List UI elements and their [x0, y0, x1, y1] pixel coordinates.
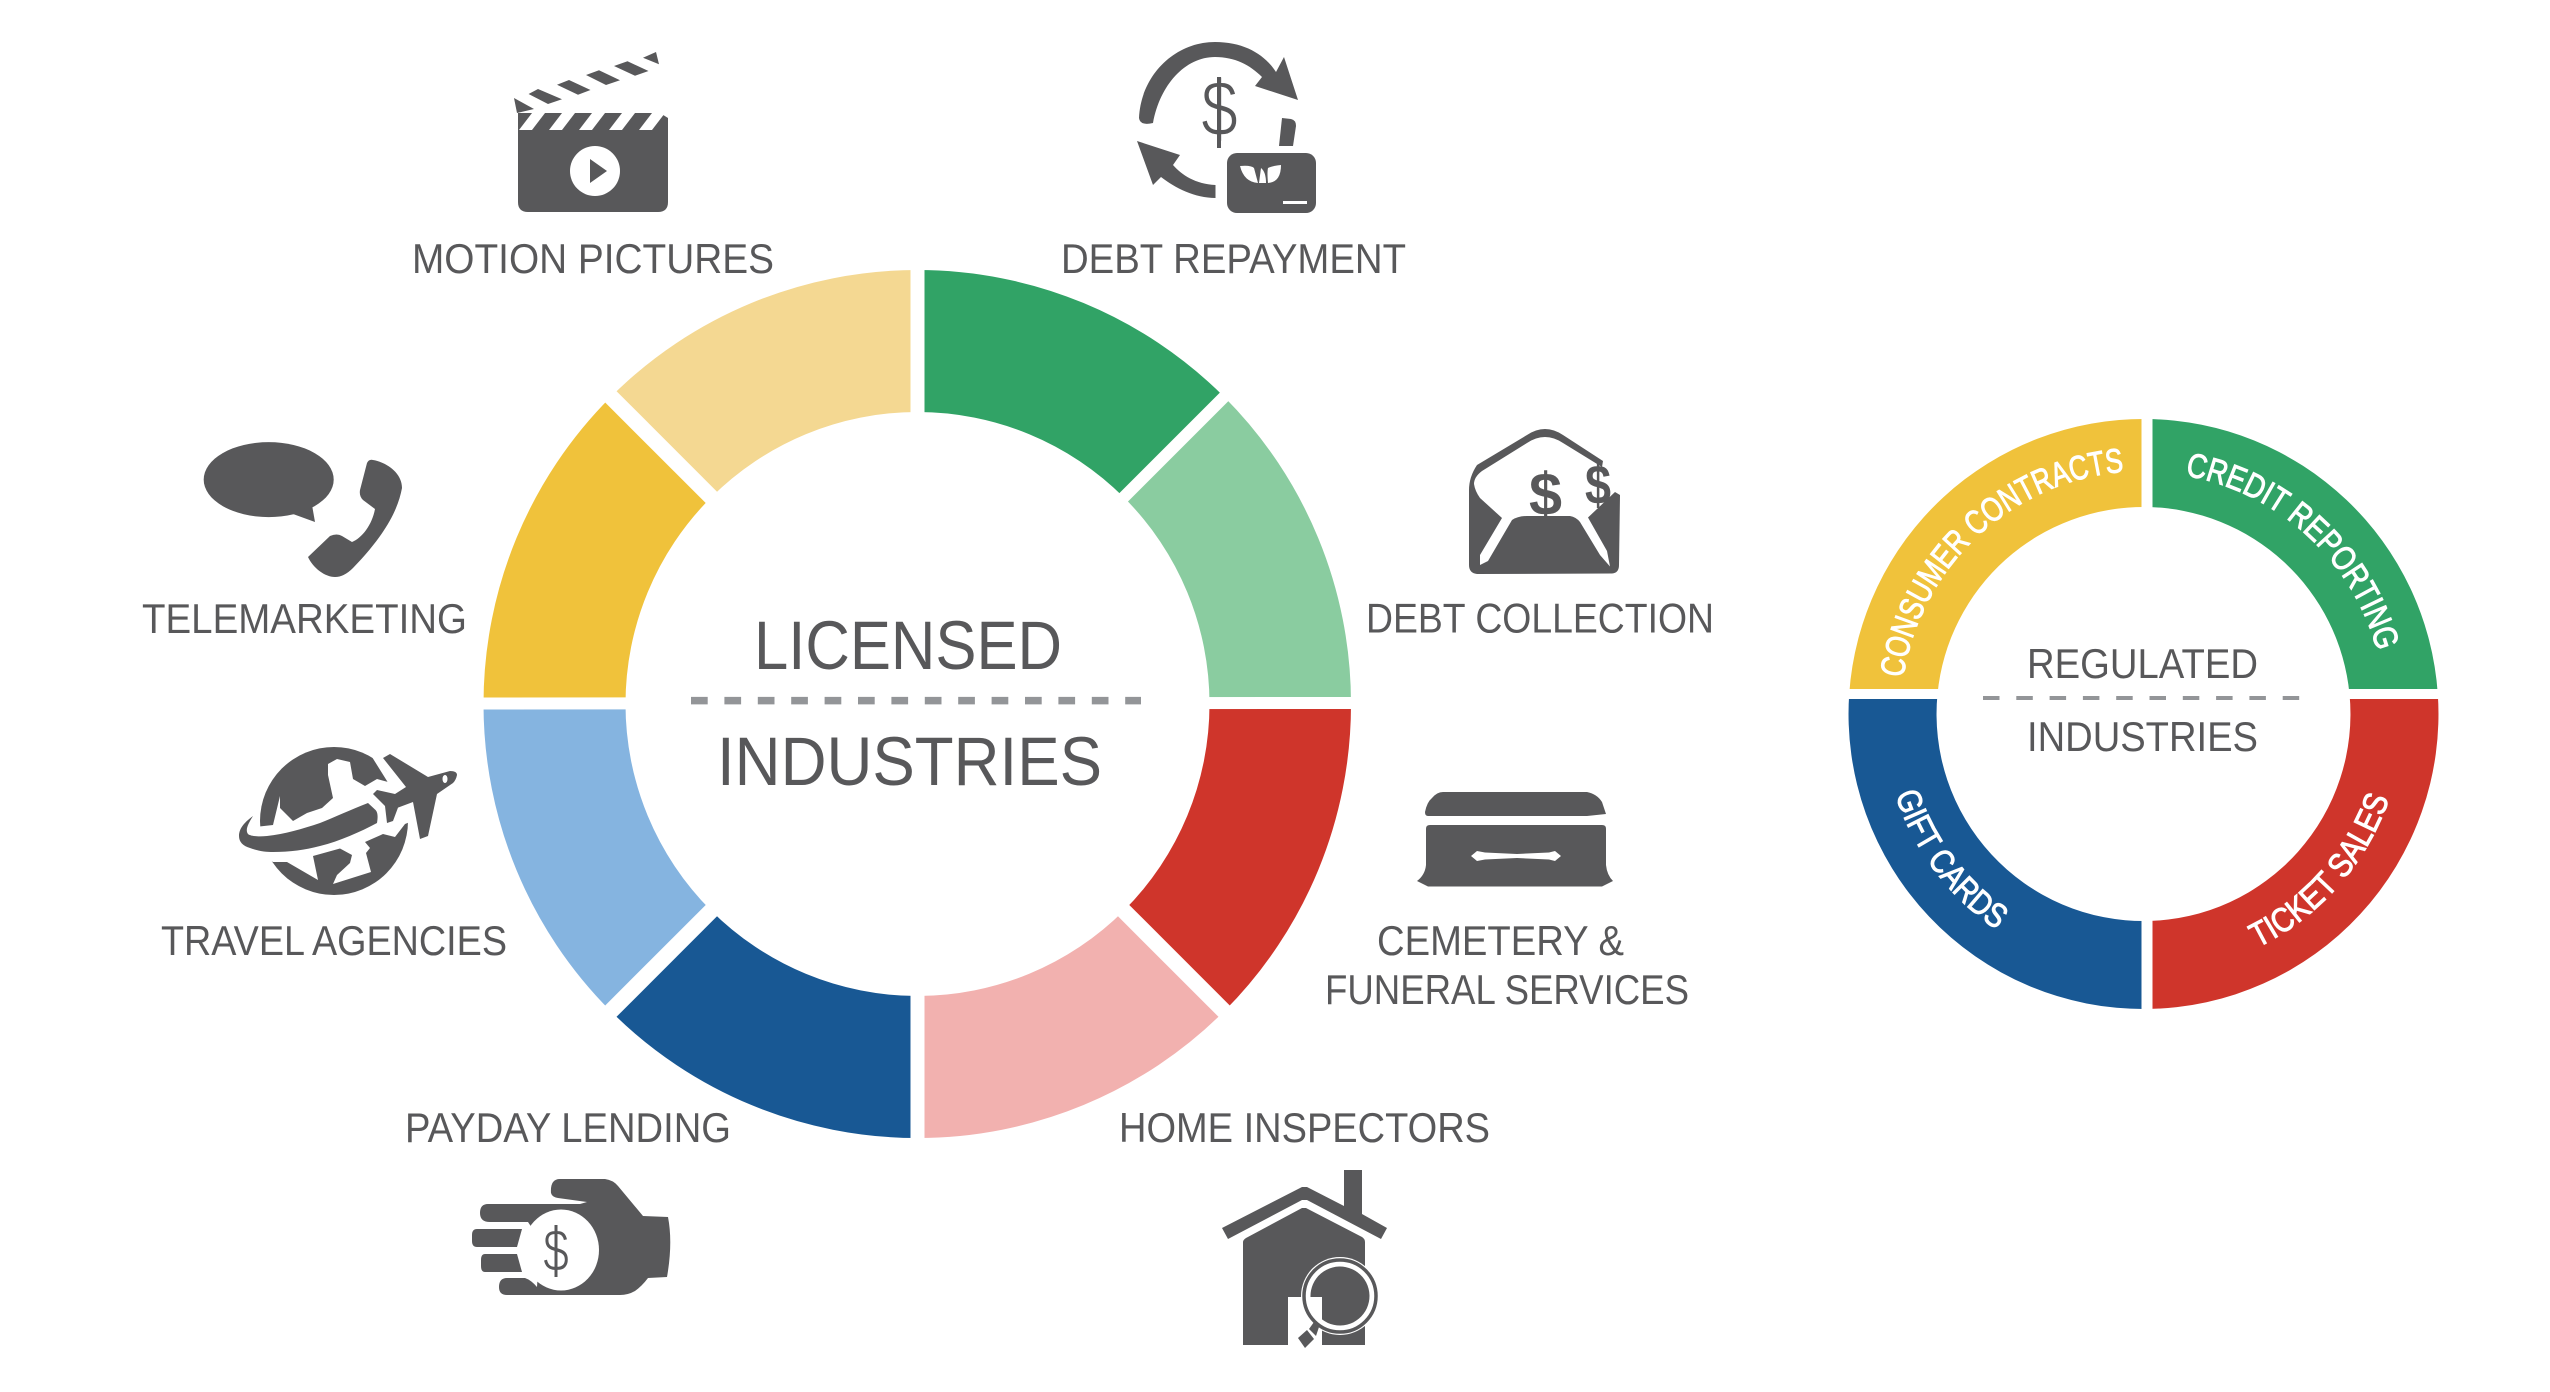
- label: telemarketing: TELEMARKETING: [142, 595, 467, 642]
- label: home inspectors: HOME INSPECTORS: [1119, 1104, 1490, 1151]
- curved label: credit reporting: CREDIT REPORTING: [2188, 454, 2398, 649]
- segment: ticket sales: [2147, 694, 2438, 1009]
- segment: credit reporting: [2147, 419, 2438, 694]
- heading: regulated: REGULATED: [2027, 640, 2258, 687]
- dashed divider: [691, 697, 1141, 704]
- curved label: consumer contracts: CONSUMER CONTRACTS: [1880, 448, 2122, 676]
- icon: debt repayment cycle: $: [1201, 63, 1238, 153]
- icon: globe and plane: [239, 745, 457, 895]
- segment: payday lending: [611, 910, 918, 1138]
- label: cemetery and funeral services: [1325, 917, 1689, 1013]
- dashed divider: [1983, 696, 2301, 700]
- segment: cemetery and funeral services: [1124, 704, 1351, 1011]
- heading: licensed: LICENSED: [754, 607, 1062, 684]
- icon: house with magnifier: [1222, 1170, 1387, 1348]
- icon: debt repayment cycle: [1137, 42, 1316, 213]
- segment: telemarketing: [484, 397, 711, 704]
- segment: consumer contracts: [1849, 419, 2147, 694]
- label: cemetery and funeral services: CEMETERY &: [1377, 917, 1624, 964]
- label: debt repayment: DEBT REPAYMENT: [1061, 235, 1406, 282]
- label: cemetery and funeral services: FUNERAL SERVICES: [1325, 966, 1689, 1013]
- label: payday lending: PAYDAY LENDING: [405, 1104, 731, 1151]
- heading: industries: INDUSTRIES: [717, 723, 1102, 800]
- segment: gift cards: [1849, 694, 2147, 1009]
- icon: open envelope with dollars: $: [1529, 461, 1562, 528]
- curved label: gift cards: GIFT CARDS: [1898, 790, 2008, 928]
- segment: debt repayment: [918, 270, 1224, 498]
- label: motion pictures: MOTION PICTURES: [412, 235, 774, 282]
- icon: hand holding coin: [472, 1179, 670, 1295]
- icon: film clapperboard: [514, 52, 668, 212]
- icon: open envelope with dollars: [1469, 429, 1620, 574]
- icon: open envelope with dollars: $: [1585, 453, 1611, 516]
- icon: telemarketing speech bubble and phone: [204, 442, 402, 577]
- segment: home inspectors: [918, 910, 1224, 1138]
- segment: debt collection: [1124, 397, 1351, 704]
- segment: travel agencies: [483, 704, 711, 1011]
- segment: motion pictures: [611, 270, 918, 498]
- label: travel agencies: TRAVEL AGENCIES: [161, 917, 507, 964]
- icon: casket: [1417, 792, 1613, 886]
- panel: regulated industries donut: [1848, 419, 2438, 1009]
- icon: hand holding coin: $: [543, 1217, 569, 1284]
- curved label: ticket sales: TICKET SALES: [2246, 793, 2388, 945]
- panel: licensed industries donut: [473, 260, 1362, 1148]
- label: debt collection: DEBT COLLECTION: [1366, 594, 1714, 642]
- heading: industries: INDUSTRIES: [2027, 713, 2258, 760]
